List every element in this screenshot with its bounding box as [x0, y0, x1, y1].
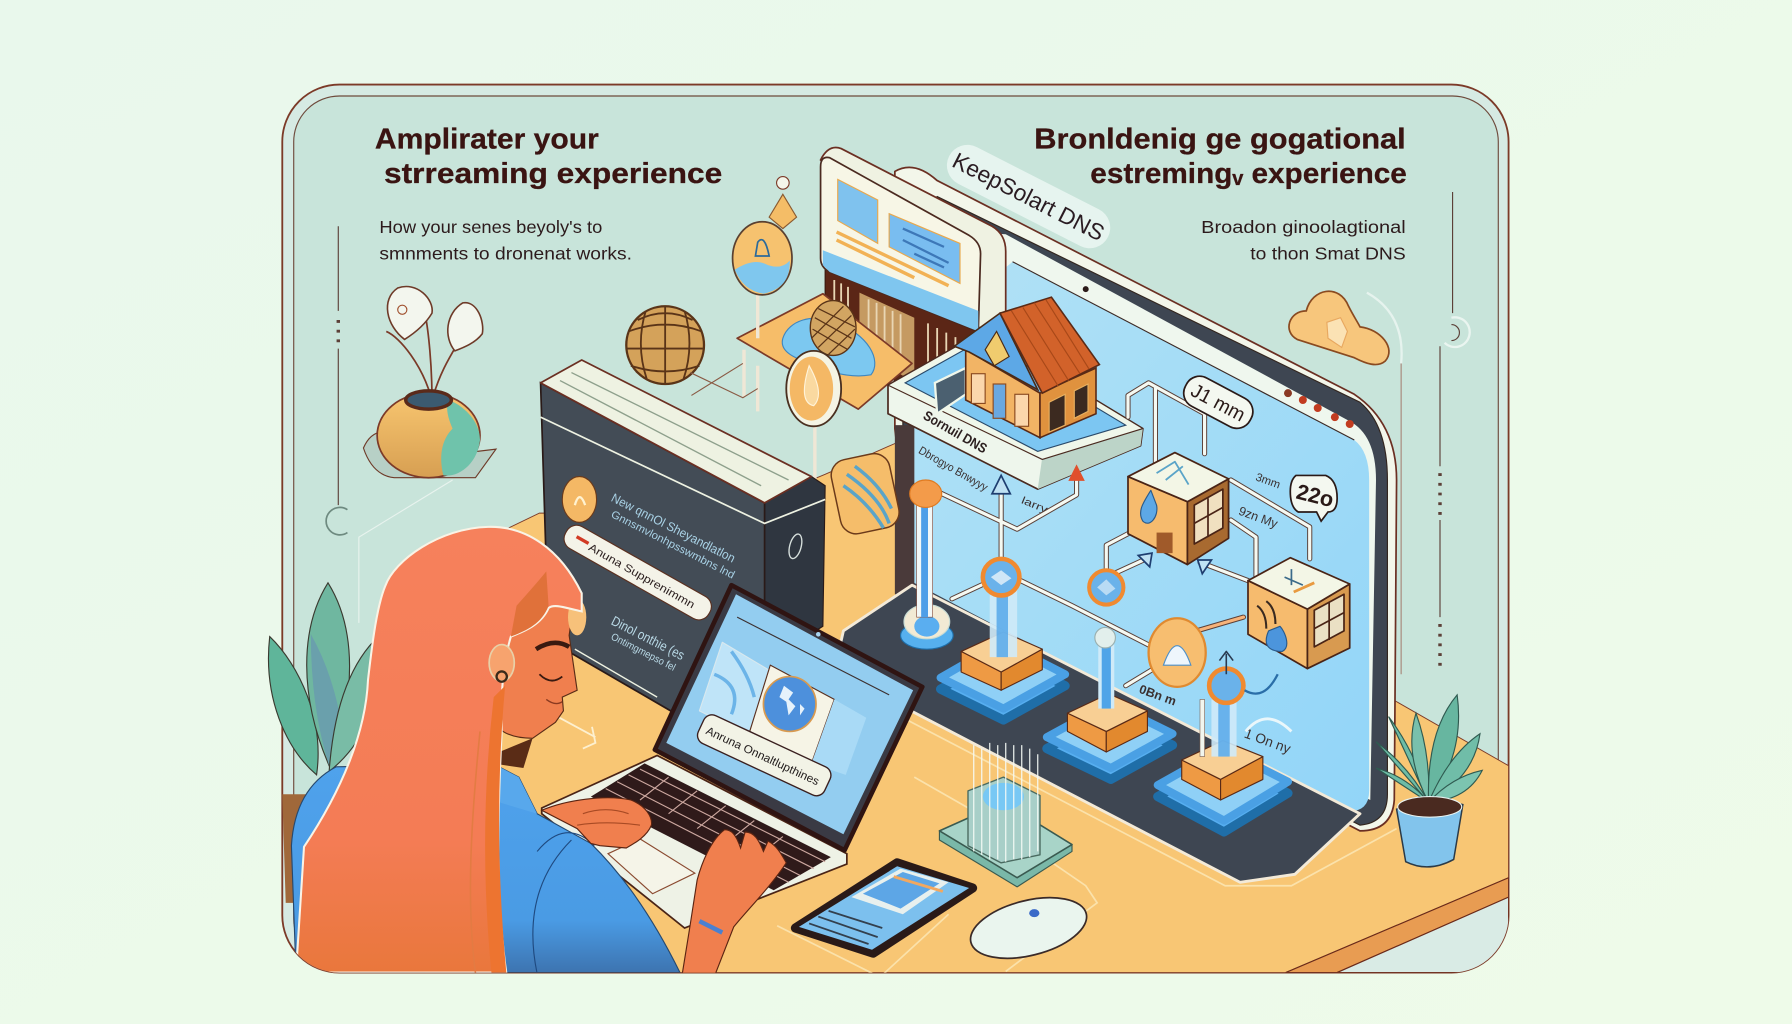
flow connector lines: [937, 383, 1310, 686]
decorative lines: [338, 192, 1453, 674]
hair: [296, 527, 582, 973]
node: base three: [1158, 651, 1291, 832]
node: big orange circle: [1149, 618, 1206, 687]
arrowheads: [992, 466, 1211, 574]
icon: coin: [786, 351, 841, 514]
node: small glowing circle: [1089, 570, 1123, 605]
node: base two: [1047, 627, 1173, 779]
heading: left: Amplirater your: [375, 124, 599, 156]
neck and face: [501, 602, 586, 768]
server block: dark box: [541, 360, 825, 714]
text block: left subtitle: smnments to dronenat works.: [379, 243, 632, 263]
plant: right pot: [1376, 695, 1482, 867]
bookcase: [825, 270, 983, 394]
callout: 22o: [1290, 475, 1337, 521]
node: box B: [1248, 558, 1350, 669]
text block: right subtitle: [1201, 217, 1406, 263]
icon: cloud: [1289, 291, 1402, 365]
callout: 31 mm: [1178, 371, 1258, 434]
icon: globe: [626, 306, 758, 398]
platform with house: Sornuil DNS: [921, 408, 990, 456]
icon: flower vase: [363, 287, 496, 478]
monitor: small upper display: [821, 148, 1006, 343]
plant: left leaves: [268, 583, 380, 903]
icon: orange stripes badge: [828, 451, 902, 537]
screen small text: 1 On ny: [1242, 726, 1293, 756]
panel: main card: [282, 85, 1509, 973]
screen small text: 3mm: [1254, 472, 1282, 491]
text block: right subtitle: to thon Smat DNS: [1250, 243, 1406, 263]
laptop screen: [655, 585, 922, 850]
desk: [425, 440, 1509, 977]
glass device on desk: [939, 743, 1072, 887]
screen small text: 9zn My: [1237, 504, 1280, 531]
screen small text: 0Bn m: [1137, 682, 1178, 709]
icon: left ring: [326, 507, 347, 535]
node: base one: [941, 559, 1065, 720]
small desk arrow: [553, 714, 595, 749]
callout: 31 mm: J1 mm: [1187, 380, 1249, 426]
phone: [795, 863, 973, 953]
platform with house: [888, 297, 1143, 489]
node: left beam stand: [901, 480, 953, 649]
mouse: [964, 887, 1093, 969]
heading: left: [375, 124, 722, 190]
text block: right subtitle: Broadon ginoolagtional: [1201, 217, 1406, 237]
icon: right ring: [1445, 317, 1470, 347]
monitor: large display: [895, 167, 1397, 831]
hands: [542, 798, 786, 974]
node: box A: [1128, 453, 1229, 565]
laptop base: [542, 755, 847, 928]
callout: 22o: 22o: [1294, 479, 1336, 512]
icon: location mirror: [733, 177, 797, 338]
text block: left subtitle: [379, 217, 632, 263]
white pill: Anuna Supprenimmn: [586, 542, 697, 611]
screen small text: [916, 445, 1293, 756]
server block: dark box: Dinol onthie (es: [609, 613, 687, 663]
laptop: [542, 585, 922, 928]
screen small text: Dbrogyo Bnwyyy: [916, 445, 990, 494]
house: [954, 297, 1099, 438]
post and stand slab: [834, 425, 1360, 882]
person: [291, 527, 786, 974]
laptop screen: Anruna Onnaltlupthines: [704, 725, 821, 788]
white pill: [560, 521, 716, 624]
heading: right: [1034, 124, 1407, 190]
monitor screen: [914, 262, 1369, 811]
heading: right: estremingᵥ experience: [1090, 158, 1407, 190]
screen small text: larry: [1019, 495, 1050, 516]
shirt: [291, 763, 680, 974]
text block: left subtitle: How your senes beyoly's to: [379, 217, 602, 237]
heading: left: strreaming experience: [384, 158, 722, 190]
server block: dark box: Ontimgmepso fel: [609, 632, 677, 674]
server block: dark box: New qnnOl Sheyandlatlon: [609, 491, 737, 566]
ear and earring: [489, 645, 514, 682]
label: KeepSolart DNS: KeepSolart DNS: [948, 147, 1109, 246]
server block: dark box: Gnnsmvlonhpsswmbns lnd: [609, 509, 737, 582]
heading: right: Bronldenig ge gogational: [1034, 124, 1406, 156]
small orange table: [737, 294, 912, 411]
